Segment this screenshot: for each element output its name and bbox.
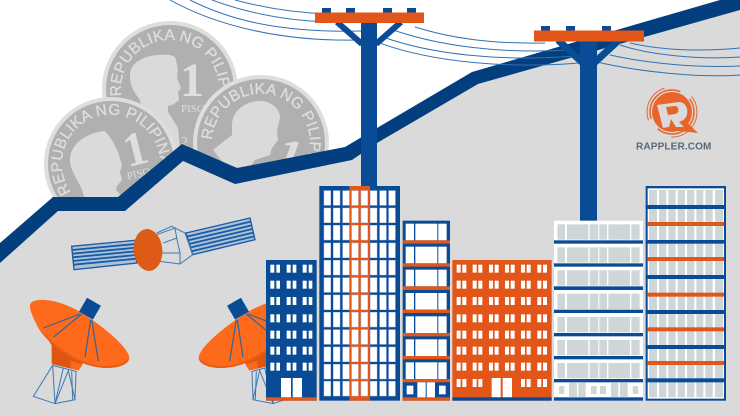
portrait silhouette <box>130 55 181 165</box>
crossarm <box>315 12 424 23</box>
portrait silhouette <box>213 101 280 170</box>
building: blue with orange floors <box>403 221 450 401</box>
piso label: PISO <box>181 103 205 115</box>
power lines <box>170 0 740 76</box>
solar panel: right <box>186 218 255 255</box>
satellite core <box>132 228 164 272</box>
piso label: PISO <box>126 165 152 183</box>
coin: back one peso <box>102 21 238 150</box>
denomination: 1 <box>269 127 310 185</box>
building: blue tower with orange column <box>319 186 400 401</box>
building: white with gray glass <box>554 221 643 401</box>
coin inscription: REPUBLIKA NG PILIPINAS <box>51 104 170 196</box>
utility pole: left <box>315 8 424 188</box>
denomination: 1 <box>117 121 153 178</box>
growth line <box>0 0 740 263</box>
Rappler logo <box>636 87 712 152</box>
coin inscription: REPUBLIKA NG PILIPINAS <box>110 29 230 96</box>
coin: left one peso <box>44 97 174 211</box>
satellite <box>72 218 255 272</box>
building: white tower with blue and orange bands <box>646 186 726 401</box>
satellite body frame <box>157 226 193 264</box>
portrait silhouette <box>70 131 130 205</box>
building: orange <box>452 260 552 401</box>
wordmark: RAPPLER.COM <box>636 142 712 152</box>
year digit: 2 <box>181 135 188 150</box>
denomination: 1 <box>180 54 204 107</box>
satellite dish: left <box>30 298 129 404</box>
building: blue with door <box>266 260 317 401</box>
coin: right one peso <box>193 75 329 185</box>
crossarm <box>534 30 644 42</box>
satellite dish: right <box>199 298 298 404</box>
solar panel: left <box>72 240 137 270</box>
utility pole: right <box>534 26 644 222</box>
